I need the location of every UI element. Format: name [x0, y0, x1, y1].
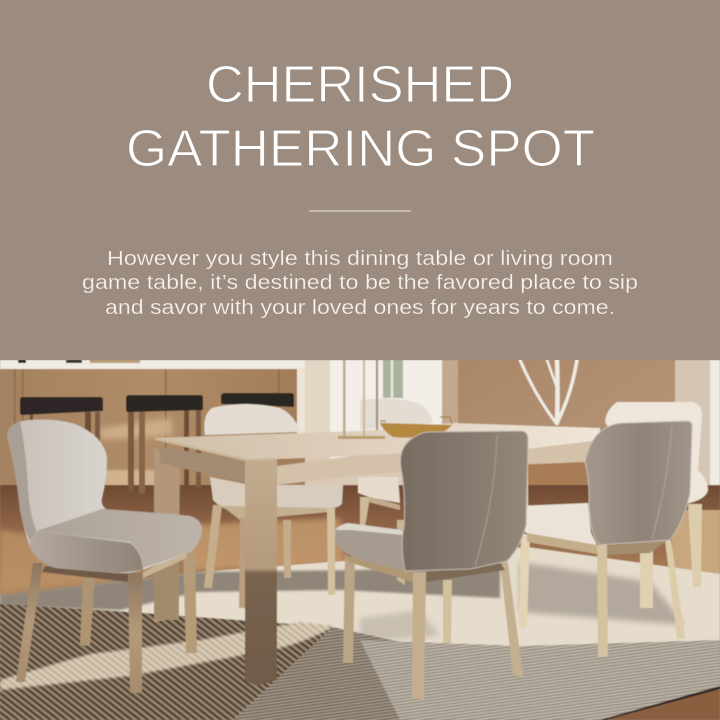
body text block — [82, 248, 638, 319]
room background: walls and window — [304, 360, 720, 486]
legs — [640, 548, 653, 608]
back seam — [652, 426, 672, 539]
floor — [0, 485, 720, 720]
panel: taupe header background — [0, 0, 720, 360]
stool three — [221, 393, 294, 407]
side apron — [160, 447, 246, 483]
divider rule — [309, 210, 411, 212]
title: CHERISHED — [206, 56, 514, 114]
bar stools — [20, 393, 294, 494]
back side edge — [7, 422, 36, 540]
chair: rear right — [605, 402, 708, 587]
back seam — [475, 435, 497, 566]
rail — [527, 532, 597, 554]
kitchen island with wood panels — [0, 360, 305, 493]
back — [585, 421, 692, 545]
top edge highlight — [155, 438, 277, 461]
body text block: game table, it’s destined to be the favored place to sip — [82, 272, 638, 294]
body text block: However you style this dining table or living room — [107, 248, 613, 270]
seat — [334, 530, 404, 570]
rear legs — [80, 578, 95, 646]
back and full silhouette — [7, 420, 202, 573]
stool one — [20, 396, 104, 442]
title — [126, 56, 595, 178]
sunlit band on rug — [0, 622, 335, 690]
title: GATHERING SPOT — [126, 120, 595, 178]
front apron — [277, 440, 600, 485]
back — [400, 431, 528, 571]
table decor: candlesticks and basket — [338, 360, 452, 439]
chair: front left — [7, 420, 202, 693]
chair: far centre behind table — [358, 399, 433, 585]
rail — [143, 550, 187, 578]
seat — [518, 503, 597, 545]
front leg — [245, 460, 277, 686]
seat top — [37, 509, 202, 568]
shaded rug band — [0, 565, 500, 610]
rail — [345, 555, 413, 582]
dining table — [155, 423, 600, 686]
rug — [0, 547, 720, 720]
striped rug section — [0, 604, 333, 720]
woven brown rug section — [233, 626, 400, 720]
photo: dining room scene — [0, 360, 720, 720]
table top — [155, 423, 600, 460]
twig decor — [520, 360, 577, 423]
chair: front centre — [335, 431, 528, 699]
body text block: and savor with your loved ones for years to come. — [105, 297, 615, 319]
basket — [380, 423, 452, 438]
stool two — [126, 395, 203, 494]
chair: rear behind table — [204, 404, 343, 608]
table rear legs and far apron — [154, 447, 528, 622]
front legs — [16, 563, 43, 682]
seat front band — [30, 531, 143, 573]
chair: front right — [518, 421, 692, 657]
woven grey rug section — [360, 640, 720, 720]
legs — [443, 580, 452, 643]
